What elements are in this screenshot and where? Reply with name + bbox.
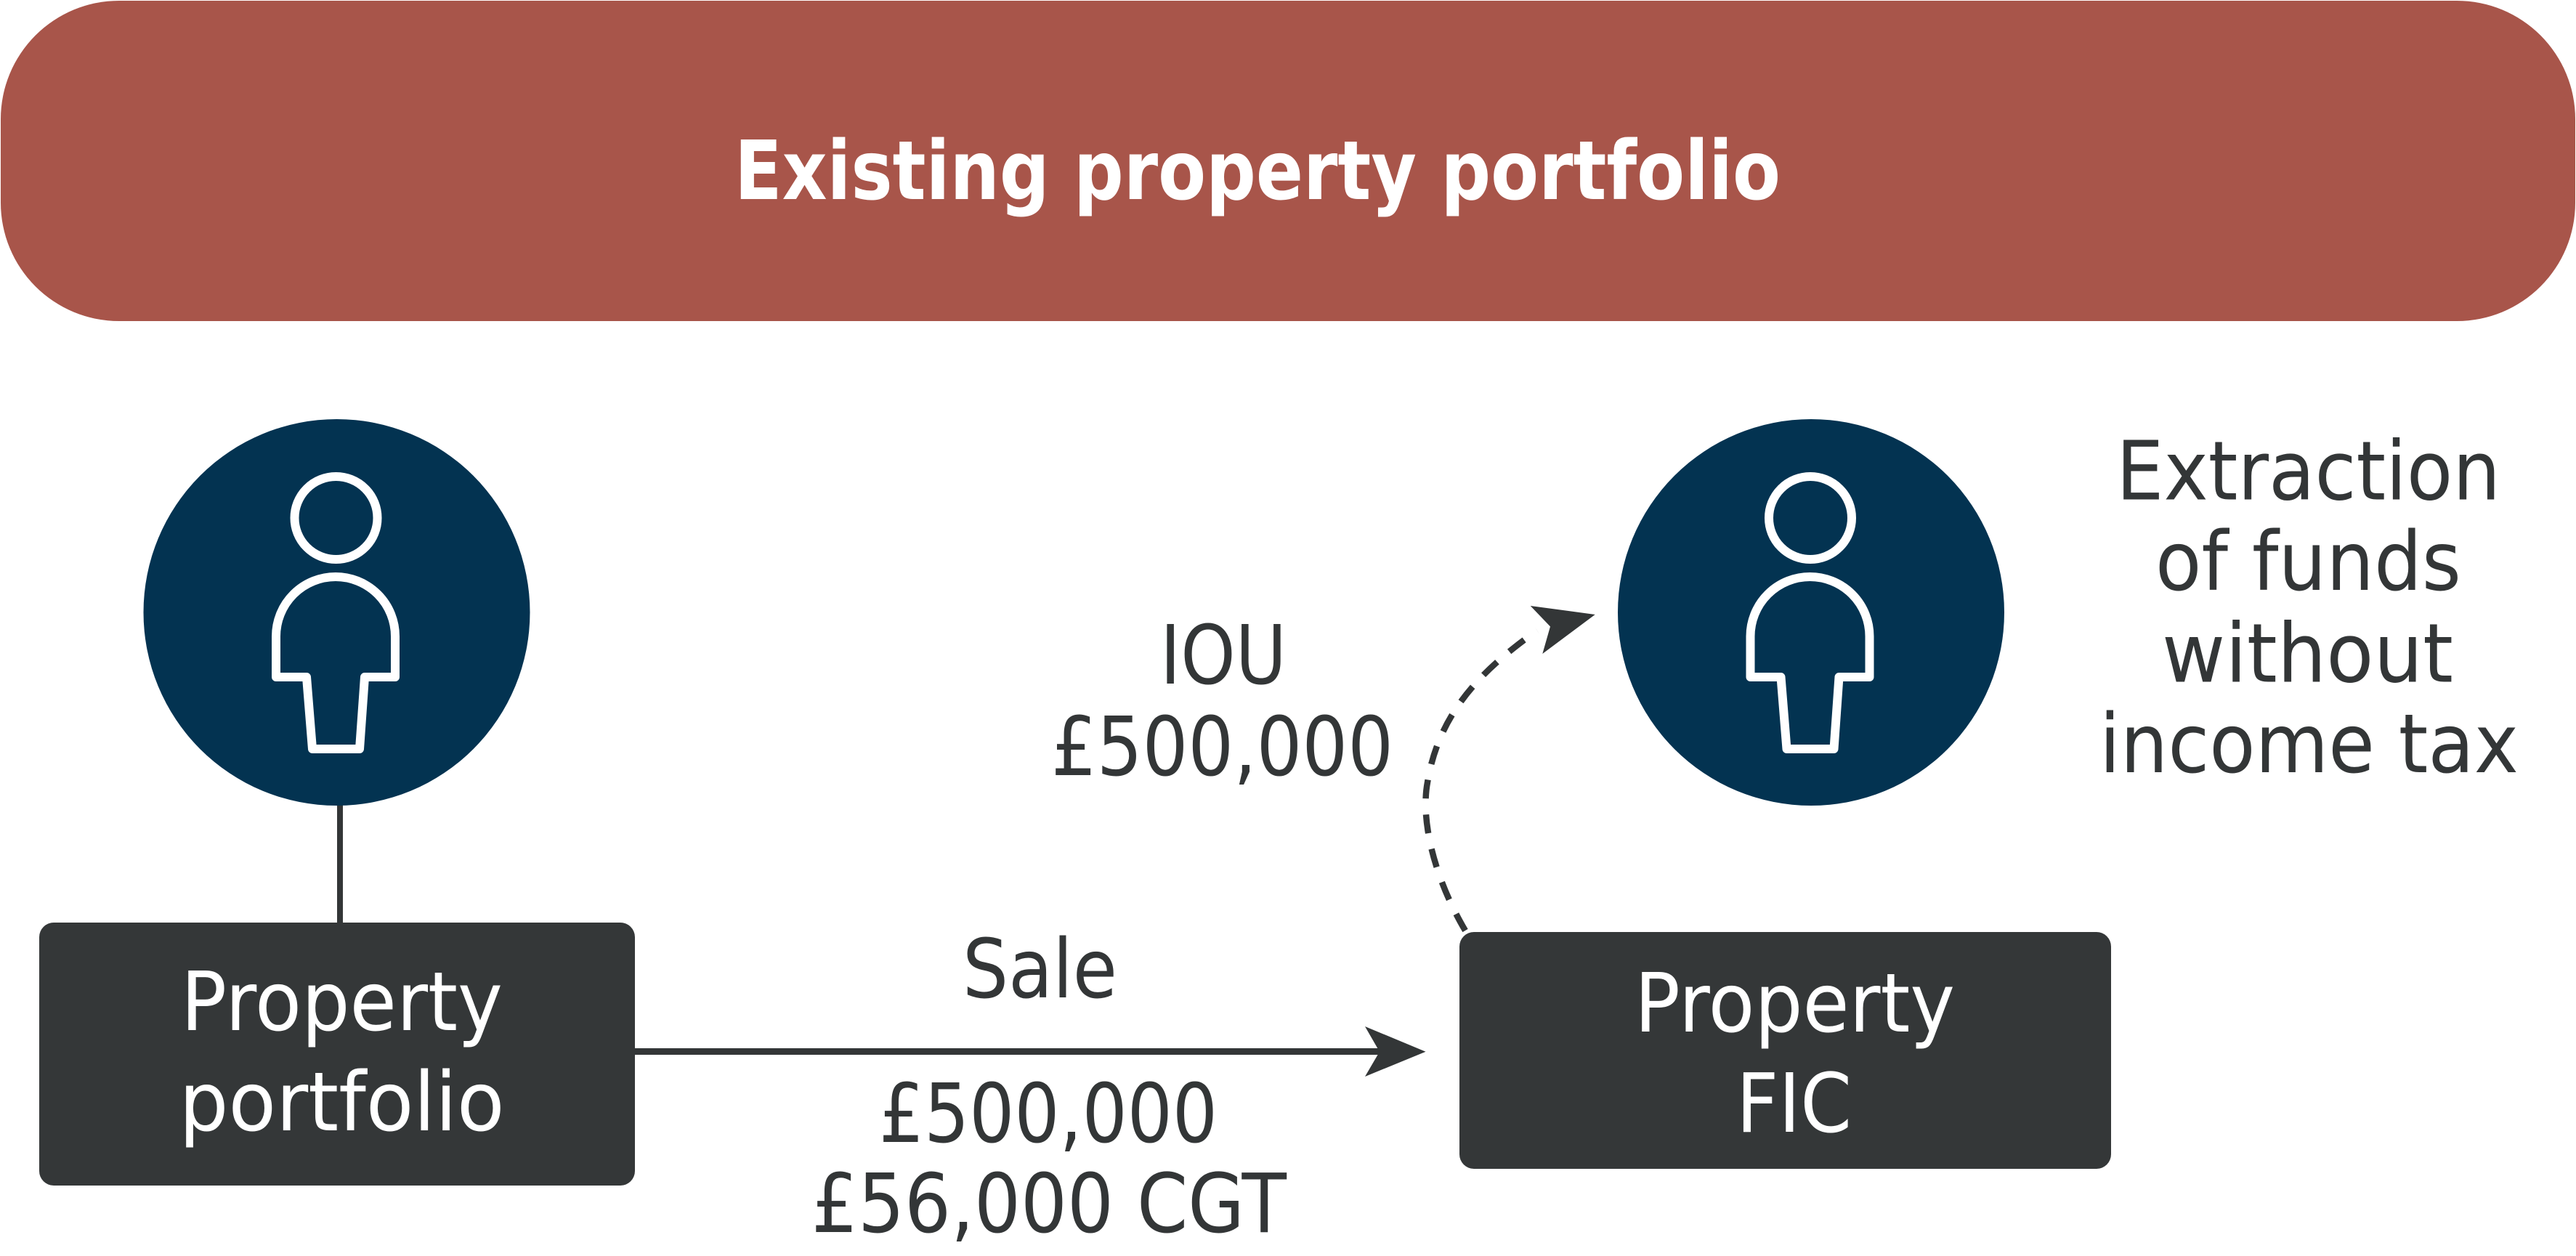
label: sale amount and CGT: £500,000 <box>879 1067 1218 1162</box>
arrow: dashed IOU extraction <box>1425 606 1595 931</box>
icon: person in circle, left <box>144 419 530 806</box>
label: sale amount and CGT: £56,000 CGT <box>811 1157 1287 1252</box>
label: extraction of funds without income tax: of funds <box>2155 515 2461 609</box>
box label: FIC <box>1736 1057 1852 1151</box>
label: extraction of funds without income tax: Extraction <box>2116 424 2500 519</box>
label: IOU amount: IOU <box>1160 609 1287 703</box>
label: extraction of funds without income tax: without <box>2162 607 2453 702</box>
box: property portfolio <box>39 923 635 1186</box>
label: extraction of funds without income tax: income tax <box>2099 697 2519 792</box>
box label: Property <box>181 955 503 1050</box>
label: sale: Sale <box>963 923 1117 1017</box>
banner: existing property portfolio <box>1 1 2575 321</box>
box label: portfolio <box>179 1056 504 1150</box>
box label: Property <box>1635 957 1955 1051</box>
banner title: Existing property portfolio <box>734 124 1781 219</box>
box: property FIC <box>1459 932 2111 1169</box>
label: IOU amount: £500,000 <box>1051 700 1393 795</box>
icon: person in circle, right <box>1618 419 2004 806</box>
connector line: person to property portfolio <box>337 803 343 926</box>
arrow: sale <box>635 1026 1425 1077</box>
